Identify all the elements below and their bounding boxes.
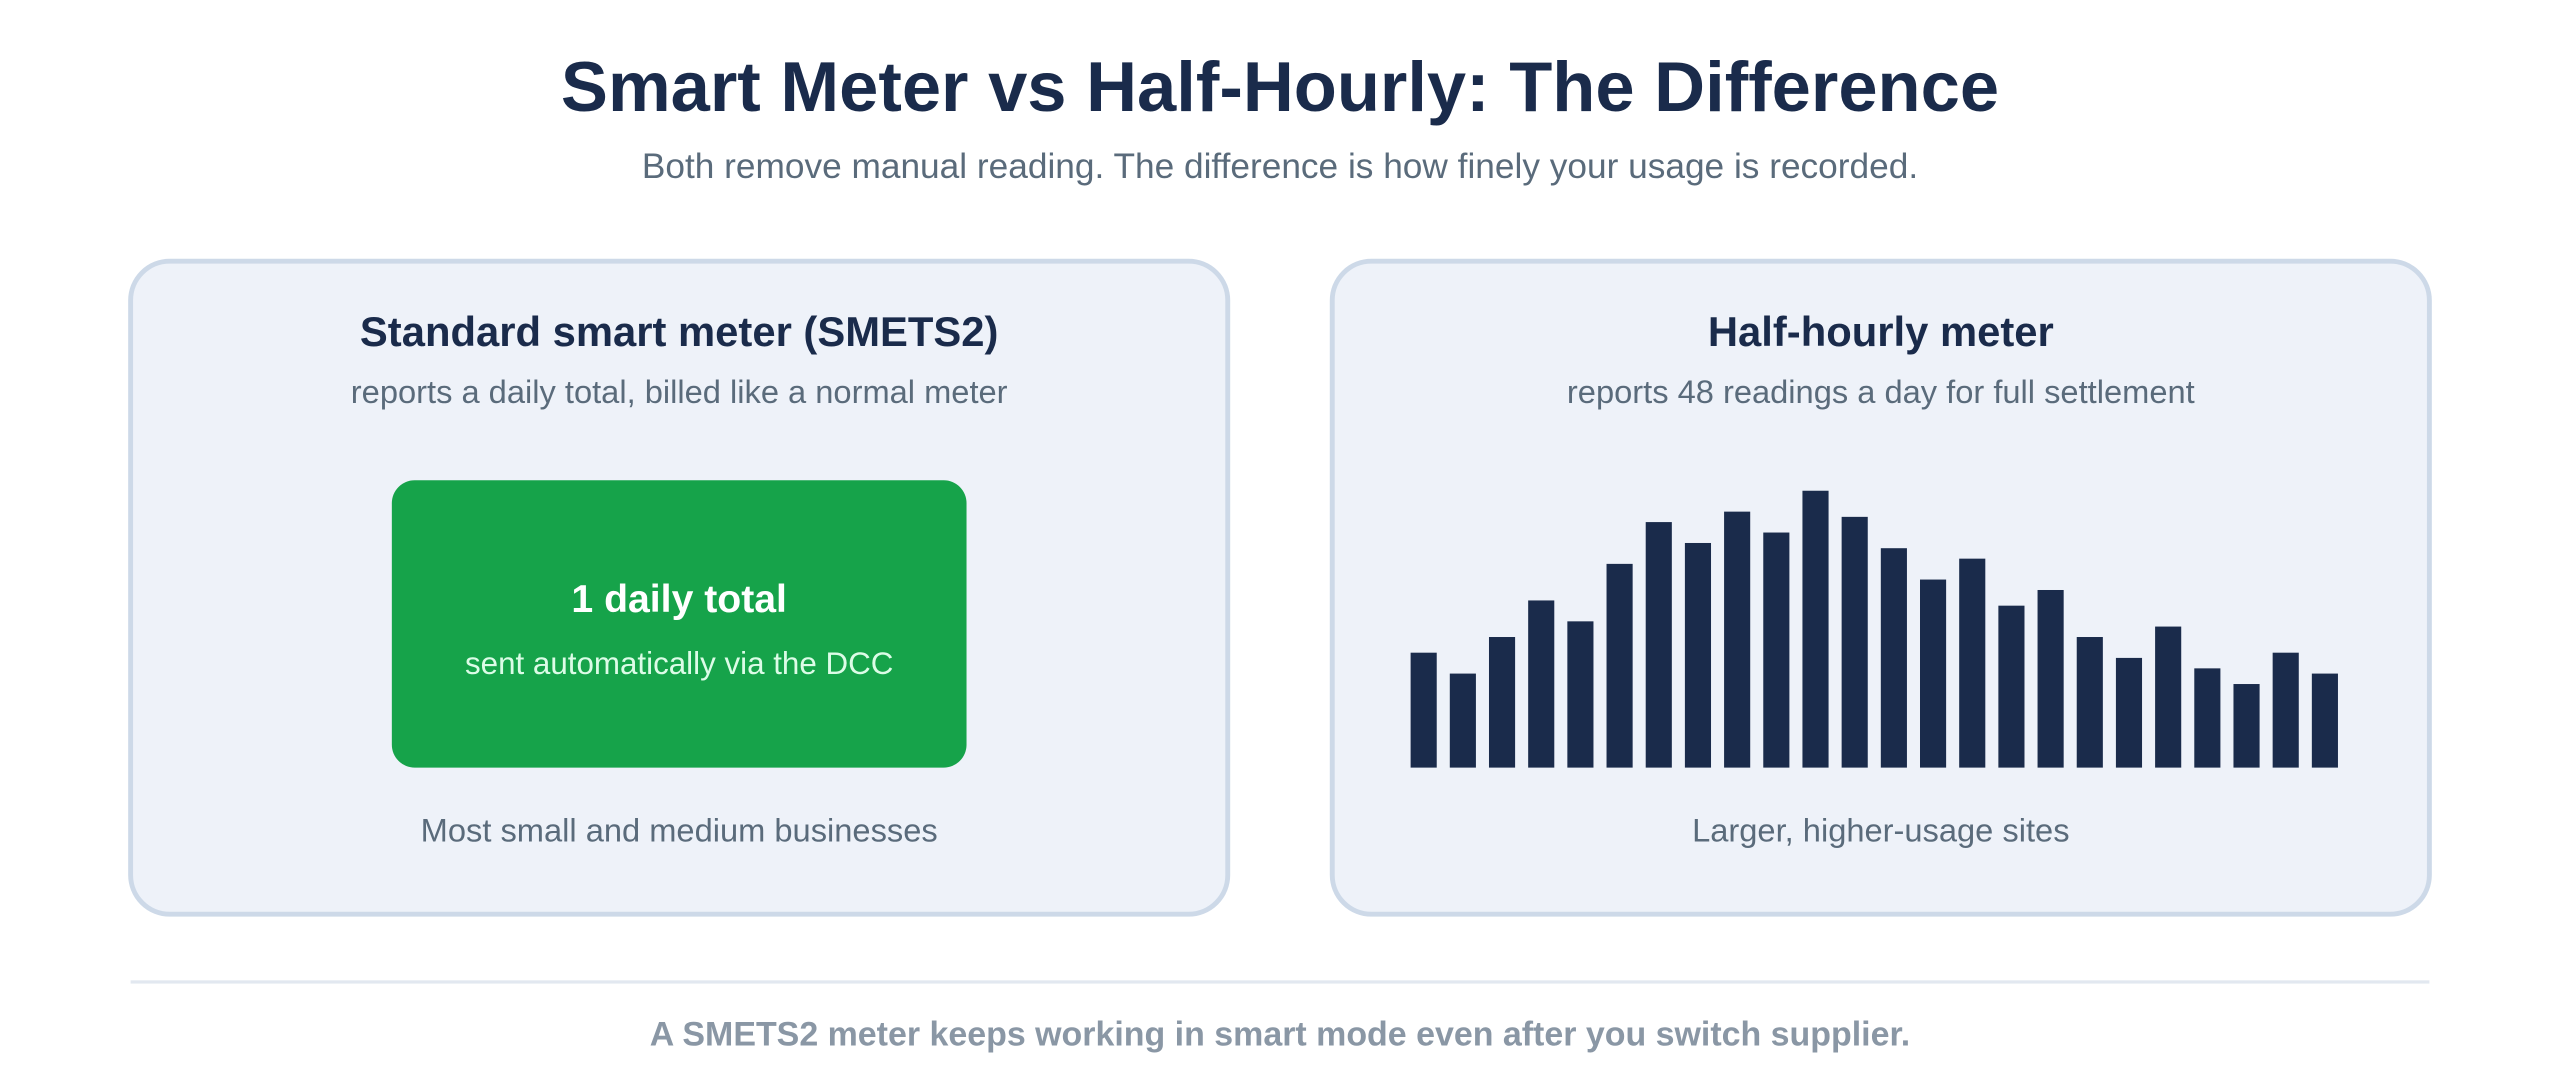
panel heading: Half-hourly meter	[1708, 308, 2054, 355]
callout: 1 daily total	[392, 480, 967, 768]
panel footnote: Larger, higher-usage sites	[1692, 812, 2070, 849]
panel description: reports a daily total, billed like a normal meter	[351, 373, 1008, 410]
callout value: 1 daily total	[571, 578, 787, 621]
panel background	[131, 261, 1228, 914]
panel description: reports 48 readings a day for full settlement	[1567, 373, 2195, 410]
title: Smart Meter vs Half-Hourly: The Difference	[561, 47, 1999, 126]
callout box	[392, 480, 967, 768]
panel heading: Standard smart meter (SMETS2)	[360, 308, 998, 355]
callout note: sent automatically via the DCC	[465, 646, 893, 681]
panel footnote: Most small and medium businesses	[421, 812, 938, 849]
footer note: A SMETS2 meter keeps working in smart mode even after you switch supplier.	[650, 1016, 1910, 1054]
panel background	[1332, 261, 2429, 914]
subtitle: Both remove manual reading. The difference is how finely your usage is recorded.	[642, 147, 1918, 186]
panel: standard smart meter	[131, 261, 1228, 914]
bar chart: half-hourly readings	[1411, 491, 2338, 768]
panel: half-hourly meter	[1332, 261, 2429, 914]
